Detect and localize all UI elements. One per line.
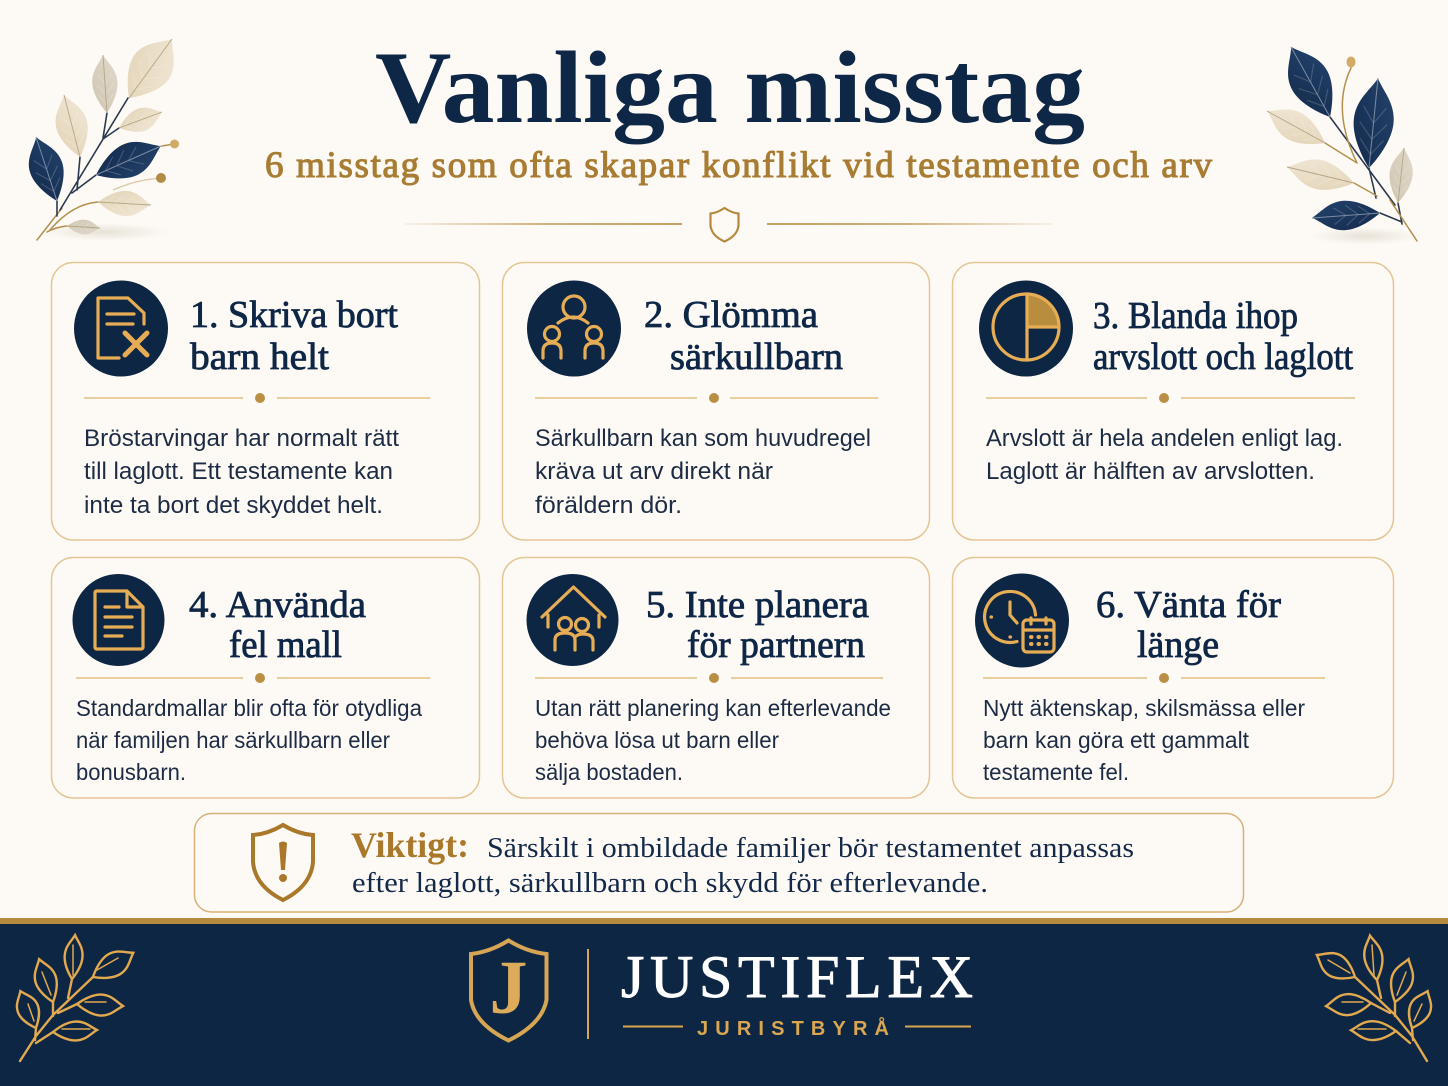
- heading: [1093, 295, 1353, 378]
- panel: mistake 2: [502, 262, 930, 540]
- decorative sprig: top right: [1260, 37, 1420, 245]
- logo: shield with J: [471, 940, 546, 1040]
- heading: [189, 584, 366, 666]
- body text: [986, 425, 1343, 485]
- body text: Bröstarvingar har normalt rätt: [84, 425, 399, 452]
- logo wordmark: JURISTBYRÅ: [697, 1016, 889, 1040]
- decorative sprig: top left: [20, 27, 189, 241]
- panel: mistake 1: [52, 262, 480, 540]
- logo wordmark: JUSTIFLEX: [621, 944, 973, 1010]
- heading: 4. Använda: [189, 584, 366, 626]
- body text: [84, 425, 399, 519]
- heading: för partnern: [687, 624, 865, 666]
- heading: 2. Glömma: [644, 294, 818, 336]
- body text: testamente fel.: [983, 759, 1129, 785]
- heading: länge: [1137, 624, 1219, 666]
- body text: kräva ut arv direkt när: [535, 458, 773, 485]
- body text: inte ta bort det skyddet helt.: [84, 492, 383, 519]
- body text: Arvslott är hela andelen enligt lag.: [986, 425, 1343, 452]
- panel: mistake 3: [952, 262, 1394, 540]
- body text: bonusbarn.: [76, 759, 186, 785]
- body text: när familjen har särkullbarn eller: [76, 727, 390, 753]
- icon: document: [72, 574, 164, 666]
- heading: barn helt: [190, 336, 329, 378]
- icon: warning shield: [253, 825, 313, 900]
- icon: pie chart: [979, 280, 1073, 376]
- body text: Särkullbarn kan som huvudregel: [535, 425, 871, 452]
- callout text: Viktigt:: [351, 825, 469, 865]
- heading: arvslott och laglott: [1093, 336, 1353, 378]
- heading: särkullbarn: [670, 336, 843, 378]
- header divider with shield icon: [405, 208, 1052, 242]
- heading: fel mall: [229, 624, 342, 666]
- body text: [535, 425, 871, 519]
- callout text: Särskilt i ombildade familjer bör testamentet anpassas: [487, 832, 1134, 864]
- panel: mistake 5: [502, 558, 930, 798]
- body text: behöva lösa ut barn eller: [535, 727, 779, 753]
- body text: Standardmallar blir ofta för otydliga: [76, 695, 422, 721]
- body text: Laglott är hälften av arvslotten.: [986, 458, 1315, 485]
- heading: 6. Vänta för: [1096, 584, 1281, 626]
- body text: [76, 695, 422, 785]
- icon: house with couple: [526, 574, 618, 666]
- icon: clock and calendar: [975, 574, 1069, 668]
- icon: family with children: [527, 280, 621, 376]
- callout text: [351, 825, 1134, 899]
- subtitle: 6 misstag som ofta skapar konflikt vid testamente och arv: [265, 145, 1212, 186]
- body text: till laglott. Ett testamente kan: [84, 458, 393, 485]
- body text: barn kan göra ett gammalt: [983, 727, 1250, 753]
- body text: sälja bostaden.: [535, 759, 683, 785]
- logo: shield with J: J: [490, 946, 528, 1030]
- icon: footer laurel right: [1311, 934, 1437, 1061]
- body text: Utan rätt planering kan efterlevande: [535, 695, 891, 721]
- heading: [190, 294, 398, 378]
- heading: [646, 584, 869, 666]
- body text: föräldern dör.: [535, 492, 682, 519]
- icon: document with cross: [74, 280, 168, 376]
- callout text: efter laglott, särkullbarn och skydd för efterlevande.: [352, 867, 988, 899]
- callout: important note: [194, 814, 1244, 912]
- heading: [644, 294, 843, 378]
- heading: 5. Inte planera: [646, 584, 869, 626]
- title: Vanliga misstag: [375, 31, 1085, 145]
- heading: 1. Skriva bort: [190, 294, 398, 336]
- footer band: [0, 918, 1448, 1086]
- panel: mistake 4: [52, 558, 480, 798]
- panel: mistake 6: [952, 558, 1394, 798]
- body text: [983, 695, 1305, 785]
- body text: Nytt äktenskap, skilsmässa eller: [983, 695, 1305, 721]
- icon: footer laurel left: [11, 934, 139, 1061]
- body text: [535, 695, 891, 785]
- heading: [1096, 584, 1281, 666]
- heading: 3. Blanda ihop: [1093, 295, 1298, 337]
- logo wordmark: [621, 944, 973, 1040]
